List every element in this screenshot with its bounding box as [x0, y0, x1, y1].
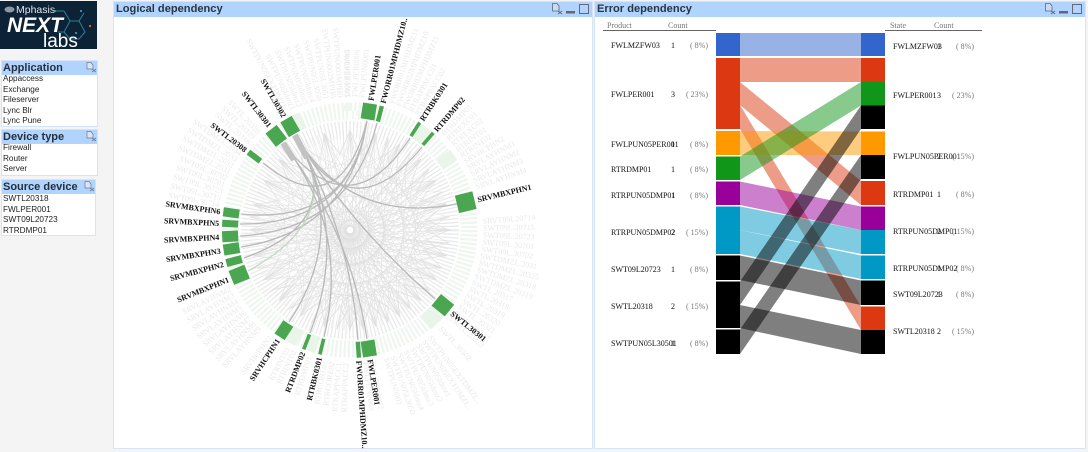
active labels: SRVHCPHN1 — [248, 337, 282, 383]
faint labels: SRVLAYHNM7 — [207, 314, 253, 356]
faint labels: SWTPUN05ldmz2 — [273, 49, 304, 109]
left labels: ( 8%) — [690, 140, 708, 149]
heading: application — [2, 61, 97, 75]
list: applications: Lync Blr — [3, 106, 32, 114]
active labels: SRVMBXPHN5 — [164, 216, 219, 228]
left labels: SWTPUN05L30501 — [611, 339, 677, 348]
list: source devices: SWTL20318 — [3, 194, 49, 203]
left labels: ( 8%) — [690, 339, 708, 348]
faint labels: SWTL.20319 — [464, 291, 507, 320]
list: device types — [3, 143, 31, 173]
faint labels — [168, 27, 540, 416]
right labels: ( 15%) — [952, 152, 974, 161]
active labels: FWLPER001 — [367, 54, 383, 101]
active labels: SRVMBXPHN3 — [165, 247, 221, 264]
list: device types: Firewall — [3, 143, 31, 152]
list: device types: Router — [3, 154, 28, 162]
right labels: 2 — [937, 227, 941, 236]
faint highlighted ring blocks — [285, 112, 457, 353]
left labels: 1 — [671, 140, 675, 149]
left labels: SWT09L20723 — [611, 265, 661, 274]
active labels: FWORR01MPHDMZ10.. — [379, 17, 409, 104]
faint labels: SWTDMZL.2032 — [181, 134, 236, 170]
faint labels: FWLPUN0002 — [368, 360, 386, 410]
left labels: RTRPUN05DMP01 — [611, 191, 675, 200]
right labels: ( 8%) — [956, 264, 974, 273]
active labels: SRVMBXPHN1 — [176, 275, 230, 304]
faint labels: SRVLAYHNM3 — [185, 291, 236, 325]
active labels: SRVMBXPHN4 — [164, 233, 219, 245]
left column headers: Count — [668, 21, 688, 30]
list: source devices: FWLPER001 — [3, 204, 51, 214]
active nodes — [222, 102, 477, 358]
heading: error dependency: Error dependency — [597, 3, 692, 15]
faint labels: SWTPUN05ldmz3 — [282, 45, 310, 106]
faint labels: SWTL.20317 — [470, 278, 514, 304]
faint labels: SRVHCPHN2 — [462, 134, 506, 166]
faint labels: RTRAPPACC01 — [407, 62, 439, 114]
faint labels: SRVLAYHNM1 — [466, 139, 517, 172]
faint labels: SWT09L.20723 — [483, 231, 535, 241]
left labels: FWLPER001 — [611, 90, 655, 99]
right labels: 1 — [937, 264, 941, 273]
left bars — [716, 33, 740, 354]
heading: source device: Source device — [3, 181, 78, 193]
list: device types: Server — [3, 164, 27, 173]
active labels: SRVMBXPHN1 — [476, 183, 532, 204]
right labels: RTRPUN05DMP02 — [893, 264, 957, 273]
faint labels: SRVLAYHNM4 — [474, 166, 528, 191]
right labels: 2 — [937, 327, 941, 336]
faint labels: SWTDMZL.20318 — [476, 265, 537, 292]
icon: clear selection — [84, 181, 94, 192]
heading: device type — [2, 130, 97, 144]
left labels: 3 — [671, 90, 675, 99]
right labels — [893, 42, 974, 336]
faint labels: SWT09L.20715 — [483, 223, 535, 233]
faint labels: SWTPUN05ldmz4 — [395, 352, 426, 412]
faint labels: SWTPUN05ldmz1 — [264, 53, 297, 112]
faint labels: SRVT09L20714 — [482, 213, 536, 226]
list: source devices: RTRDMP01 — [3, 226, 47, 234]
active labels: RTRDMP02 — [283, 351, 307, 394]
faint labels: SWTPUN05ldmz4 — [292, 43, 317, 104]
right column headers — [885, 21, 982, 30]
active labels: SWTL30301 — [240, 90, 273, 129]
list: source devices — [3, 194, 58, 234]
right labels: FWLPER001 — [893, 91, 937, 100]
faint labels: FWLPER0005 — [342, 49, 352, 97]
faint labels: SRVHCPHN2 — [239, 334, 274, 376]
right labels: SWT09L20723 — [893, 290, 943, 299]
faint labels: SWTPUN05L3050 — [389, 354, 417, 416]
faint labels: SWTPUN05EXTDMZL.. — [420, 338, 474, 412]
faint labels: SWT09L.30701 — [482, 238, 534, 251]
faint labels: SWTDMZL.20325 — [478, 258, 540, 282]
active labels: RTRBK0301 — [418, 81, 450, 123]
faint labels: SWTL.20323 — [447, 314, 486, 350]
faint labels: SWTL.20318 — [213, 111, 252, 147]
faint labels: SWTPUN05L3050 — [301, 39, 324, 102]
faint labels: SWTL.20320 — [460, 297, 502, 328]
left labels: 1 — [671, 265, 675, 274]
left labels: ( 8%) — [690, 41, 708, 50]
left labels: SWTL20318 — [611, 302, 653, 311]
faint labels: RTRINT02 — [458, 132, 493, 160]
right column headers: State — [890, 21, 906, 30]
left labels: 1 — [671, 165, 675, 174]
active labels — [164, 17, 532, 449]
faint labels: RTRAPPACC02 — [413, 67, 448, 117]
faint labels: SWTPUN05EXTDMZL.. — [244, 37, 291, 115]
right labels: RTRDMP01 — [893, 190, 933, 199]
faint labels: RTRINT01 — [267, 346, 292, 382]
active labels: SWTL30302 — [259, 77, 288, 119]
faint labels: SWT09L.30702 — [481, 245, 534, 261]
left labels: ( 15%) — [686, 228, 708, 237]
icon: clear selection — [86, 62, 96, 72]
left column headers: Product — [607, 21, 633, 30]
faint labels: RTRCORE01 — [312, 360, 330, 405]
right labels: 1 — [937, 290, 941, 299]
list: applications: Appaccess — [3, 74, 43, 83]
icon: clear selection — [86, 131, 96, 142]
right labels: FWLMZFW03 — [893, 42, 942, 51]
faint labels: SWTDMZL.2034 — [191, 117, 243, 158]
list: applications: Exchange — [3, 84, 39, 94]
right labels: ( 15%) — [952, 227, 974, 236]
faint labels: SWTL.20322 — [452, 309, 492, 343]
faint labels: RTRAPPACC1 — [330, 362, 343, 412]
faint labels: RTRDMP01 — [293, 355, 314, 396]
heading: logical dependency: Logical dependency — [116, 3, 223, 15]
active labels: SWTL30301 — [449, 309, 488, 343]
left labels: FWLMZFW03 — [611, 41, 660, 50]
panel: source device filter — [1, 179, 96, 236]
left column headers — [603, 21, 716, 30]
logo: Mphasis NEXT labs — [0, 1, 97, 49]
faint labels: SWTL.20321 — [456, 303, 497, 335]
left labels: ( 8%) — [690, 165, 708, 174]
faint labels: RTREXC01 — [445, 110, 479, 143]
list: source devices: SWT09L20723 — [3, 215, 58, 224]
flows — [740, 33, 861, 354]
right labels: 3 — [937, 91, 941, 100]
list: applications: Lync Pune — [3, 116, 41, 125]
active labels: SRVMBXPHN2 — [169, 260, 225, 283]
faint labels: FWLPUN0003 — [361, 362, 376, 411]
heading: logical dependency — [114, 2, 592, 17]
panel: device type filter — [1, 129, 98, 176]
right labels: ( 8%) — [956, 190, 974, 199]
left labels: 1 — [671, 41, 675, 50]
faint labels: SWTPUN0003MPH0 — [331, 27, 345, 98]
left labels: ( 23%) — [686, 90, 708, 99]
active labels: SWTL20308 — [209, 121, 249, 154]
active labels: FWLPER001 — [366, 359, 382, 406]
left labels: ( 15%) — [686, 302, 708, 311]
faint labels: SRVLAYHNM5 — [195, 303, 244, 341]
faint labels: SRVLAYHNM9 — [220, 325, 263, 370]
left labels: 2 — [671, 302, 675, 311]
faint labels: FWLPER0006 — [351, 49, 361, 97]
chart: sankey of error dependency — [603, 21, 982, 354]
left labels: RTRPUN05DMP02 — [611, 228, 675, 237]
right labels: 2 — [937, 152, 941, 161]
right labels: FWLPUN05PER001 — [893, 152, 961, 161]
faint labels: FWORR02MPHDMZ11 — [400, 34, 441, 111]
faint labels: RTRINT01 — [454, 125, 488, 154]
faint labels: SRVLAYHNM4 — [190, 297, 240, 333]
left labels: RTRDMP01 — [611, 165, 651, 174]
faint labels: SWTPUN05L3051 — [311, 37, 331, 100]
faint labels: RTRINT02 — [275, 349, 298, 386]
panel: application filter — [1, 60, 98, 127]
icons: panel controls — [1045, 3, 1082, 14]
faint labels: RTRCORE02 — [321, 361, 336, 406]
list: applications: Fileserver — [3, 95, 39, 104]
chart: chord diagram of logical dependency — [164, 17, 540, 449]
faint chord web — [209, 89, 491, 371]
faint labels: SRVLAYHNM2 — [181, 285, 233, 316]
heading: source device — [2, 180, 95, 194]
faint labels: SWTDMZL.2031 — [177, 143, 232, 176]
faint labels: SWTL.20320 — [226, 98, 262, 136]
left labels: 1 — [671, 191, 675, 200]
faint labels: SWT09L.30715 — [169, 181, 222, 203]
right labels: SWTL20318 — [893, 327, 935, 336]
left labels: 1 — [671, 339, 675, 348]
faint labels: SWTPUN05ldmz2 — [408, 346, 445, 404]
left labels: FWLPUN05PER001 — [611, 140, 679, 149]
logo: Mphasis NEXT labs: NEXT — [7, 14, 65, 37]
faint labels: FWLPER0005 — [343, 49, 353, 97]
faint labels: SRVLAYHNM8 — [213, 320, 258, 363]
active chords — [240, 121, 457, 340]
panel: logical dependency — [113, 1, 593, 449]
active labels: RTRBK0301 — [305, 356, 324, 401]
faint labels: SWTL.20319 — [219, 104, 257, 141]
heading: device type: Device type — [3, 131, 64, 143]
faint labels: SWT09L.30702 — [178, 154, 229, 183]
right labels: 1 — [937, 190, 941, 199]
faint labels: SRVLAYHNM6 — [201, 309, 248, 349]
left labels: ( 8%) — [690, 191, 708, 200]
faint labels: SWTPUN0002 — [382, 357, 404, 406]
left labels — [611, 41, 708, 348]
faint labels: SWTDMZL.20319 — [473, 272, 534, 301]
active labels: RTRDMP02 — [432, 95, 467, 134]
right labels: ( 23%) — [952, 91, 974, 100]
right bars — [861, 33, 885, 354]
right labels: ( 8%) — [956, 42, 974, 51]
faint labels: SRVLAYHNM3 — [472, 157, 525, 185]
left labels: 2 — [671, 228, 675, 237]
faint labels: SWTPUN05ldmz3 — [402, 349, 436, 408]
logo: Mphasis NEXT labs: Mphasis — [16, 4, 55, 16]
faint labels: RTREXC02 — [449, 116, 485, 148]
faint labels: SWT09L.30714 — [168, 191, 220, 210]
faint labels: SWTPUN0002MPH0 — [320, 28, 338, 99]
faint labels: SWTDMZL.2033 — [186, 126, 239, 164]
panel: error dependency — [594, 1, 1086, 449]
right labels: 1 — [937, 42, 941, 51]
faint labels: SWT09L.30723 — [172, 172, 224, 196]
faint labels: SWTDMZL.2031 — [480, 251, 538, 271]
left labels: ( 8%) — [690, 265, 708, 274]
faint labels: RTRAPPACC2 — [340, 363, 350, 413]
faint labels: RTRDMP01 — [440, 102, 474, 138]
faint labels: SWTPUN05EXTDMZL.. — [426, 334, 483, 406]
right column headers: Count — [934, 21, 954, 30]
heading: application: Application — [3, 62, 63, 74]
faint labels: SWT09L.30701 — [175, 163, 226, 189]
faint labels: FWORR01MPHDMZ11 — [387, 27, 420, 105]
active labels: SRVMBXPHN6 — [165, 199, 221, 216]
right labels: RTRPUN05DMP01 — [893, 227, 957, 236]
faint labels: FWLPUN0001 — [358, 48, 371, 98]
faint labels: SWTPUN05ldmz1 — [414, 342, 453, 399]
right labels: ( 8%) — [956, 290, 974, 299]
faint labels: SRVLAYHNM2 — [469, 148, 521, 178]
active labels: FWORR01MPHDMZ10.. — [354, 360, 369, 449]
list: applications — [3, 74, 43, 125]
faint labels: FWORR02MPHDMZ10 — [394, 30, 431, 108]
right labels: ( 15%) — [952, 327, 974, 336]
icons: panel controls — [552, 3, 589, 14]
faint labels: SWTL.30302 — [437, 325, 473, 363]
faint tick ring — [231, 111, 469, 349]
faint labels: SWTL.20318 — [467, 285, 511, 312]
heading: error dependency — [595, 2, 1085, 17]
